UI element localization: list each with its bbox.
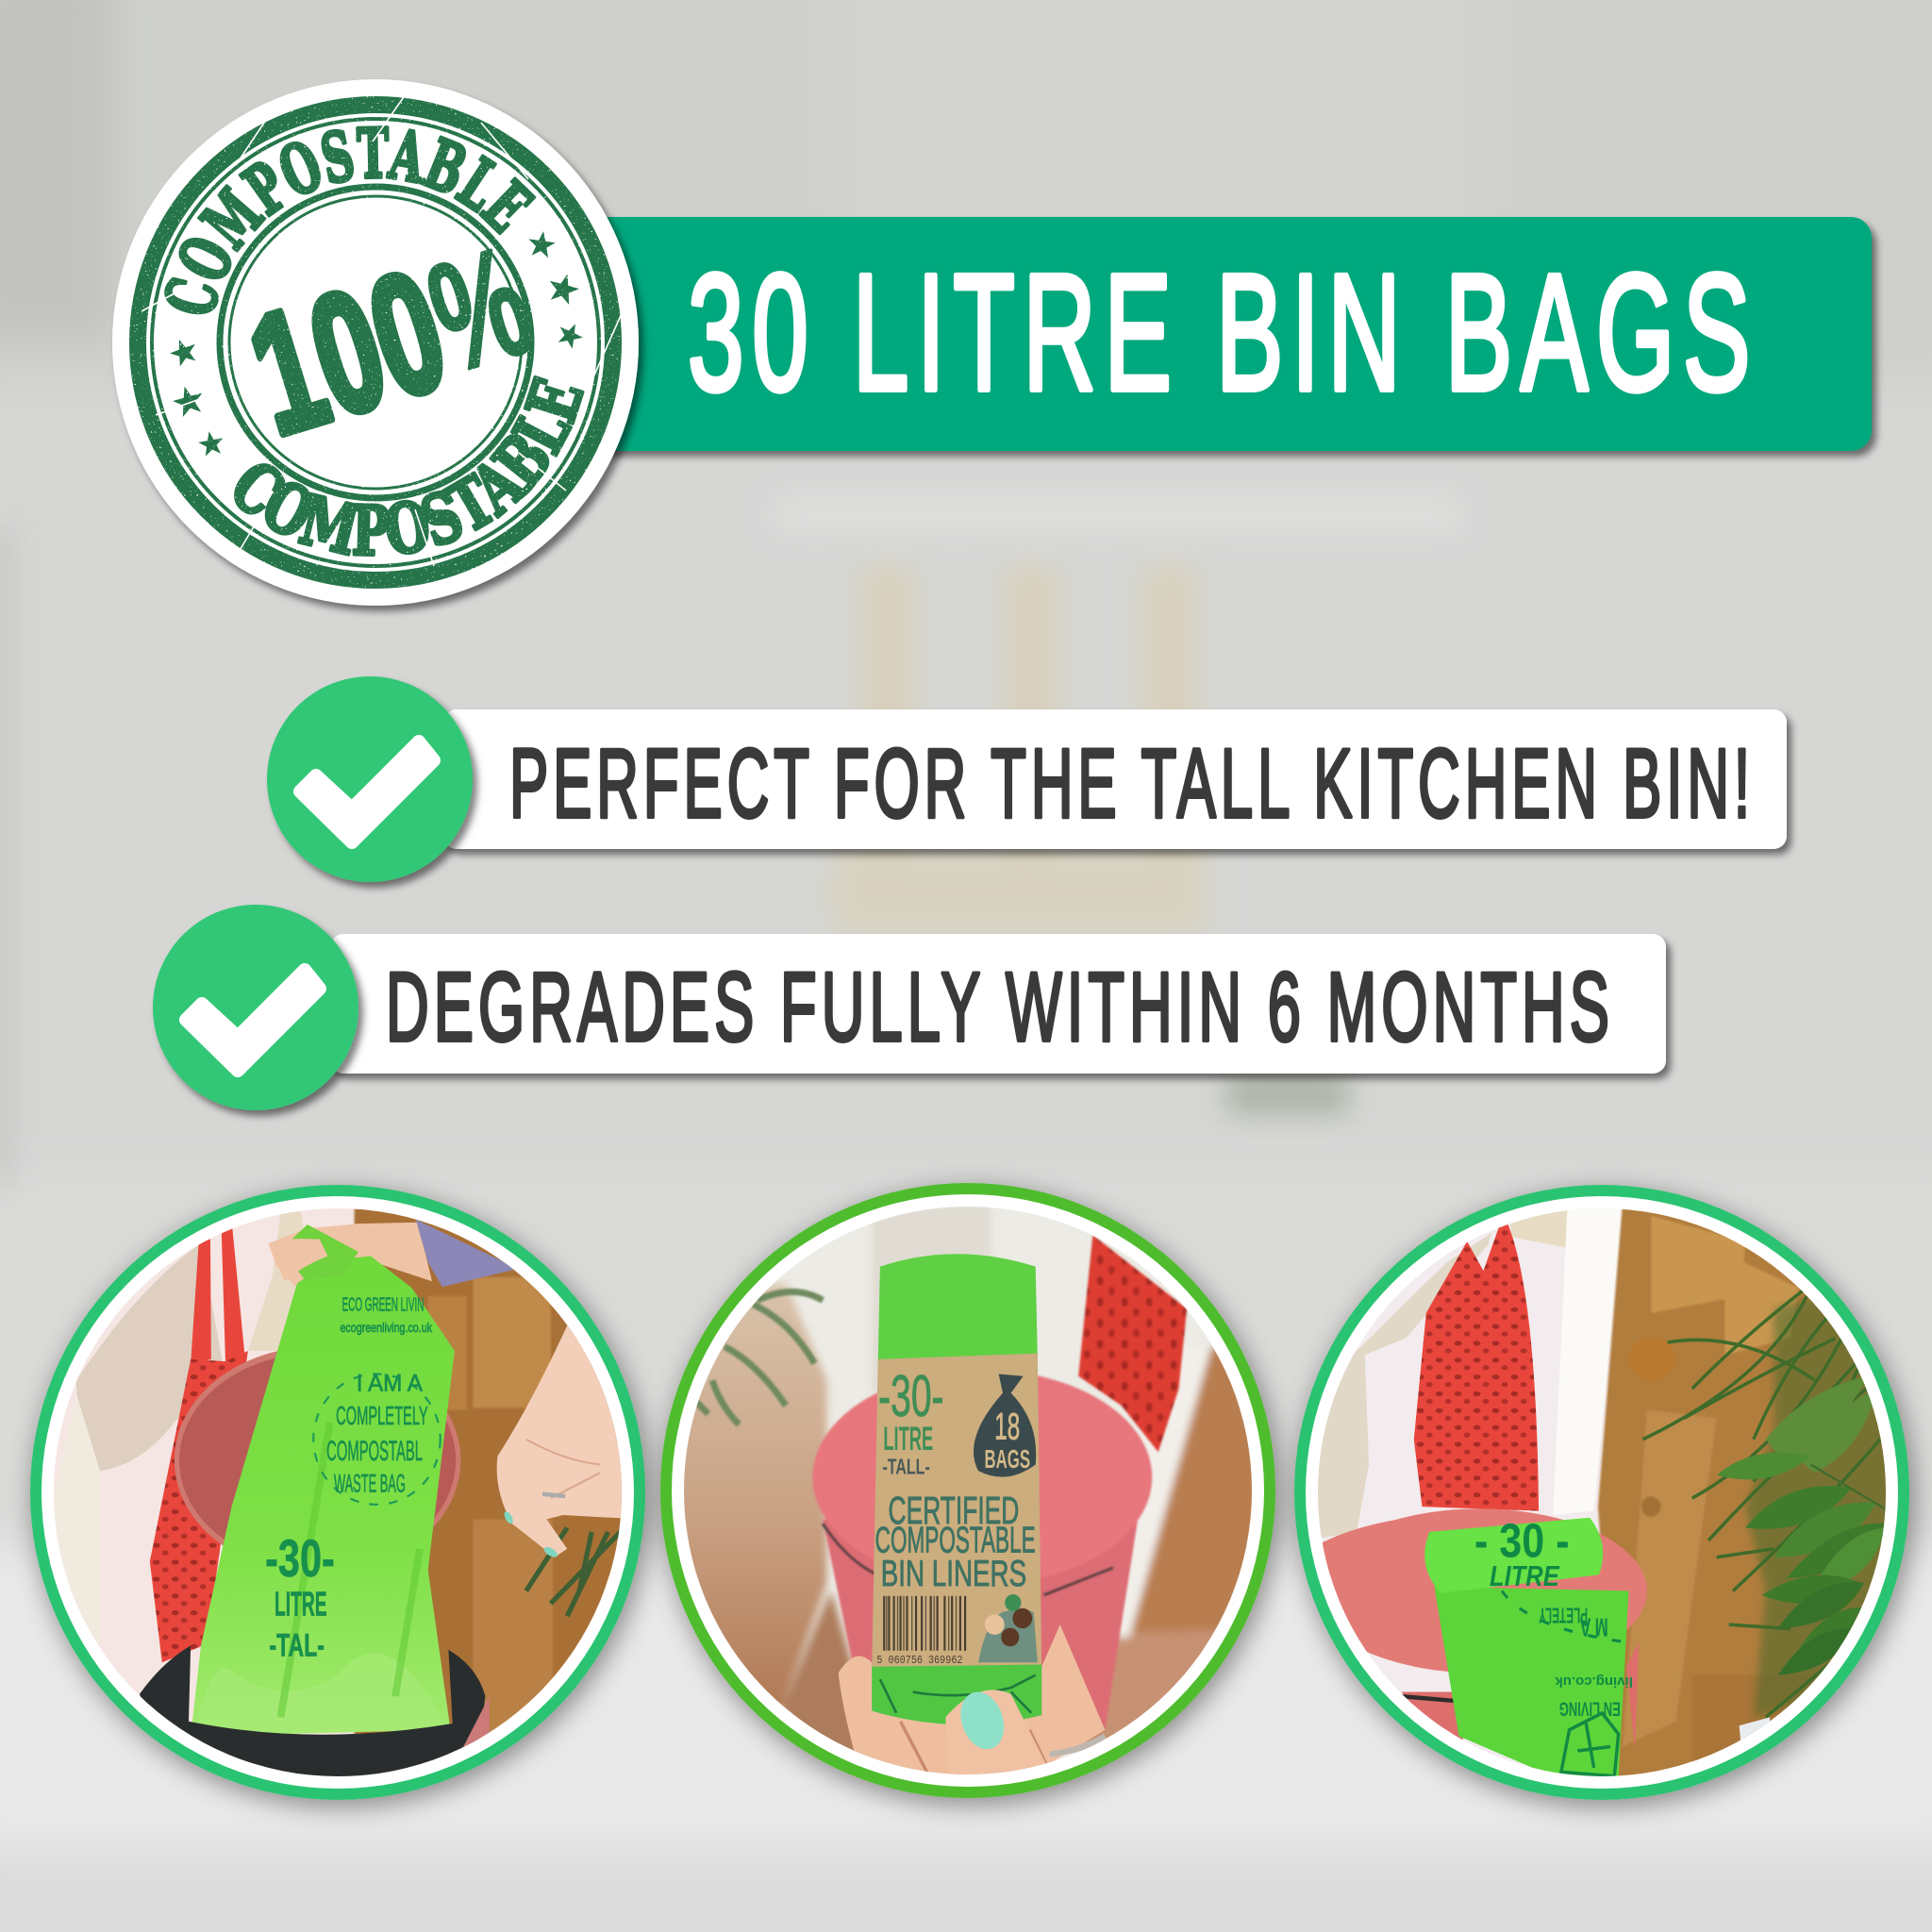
label text: compostable: COMPOSTABLE (875, 1520, 1036, 1560)
door (1598, 1204, 1913, 1793)
barcode (876, 1596, 965, 1667)
pink bin edge (453, 1696, 490, 1768)
pink bin (1311, 1508, 1647, 1768)
white cloth (54, 1396, 100, 1645)
photo 1 frame (30, 1185, 645, 1800)
roll print: litre: LITRE (1490, 1561, 1560, 1592)
stamp upper arc text: COMPOSTABLE (164, 125, 536, 315)
feature row 2 (153, 905, 1666, 1110)
green roll bottom (872, 1665, 1041, 1724)
tote bag (248, 1211, 304, 1351)
banner bar (528, 217, 1872, 451)
bag print: tall: -TAL- (269, 1628, 325, 1664)
plant shadow mass (1745, 1284, 1905, 1717)
black bin rim (140, 1645, 485, 1778)
hand holding roll (839, 1624, 1105, 1785)
photo 1 scene (54, 1208, 622, 1776)
label illustration of people (978, 1594, 1038, 1662)
barcode: 5 060756 369962 (876, 1655, 963, 1667)
feature bar 2 (330, 934, 1666, 1074)
green roll top (878, 1254, 1038, 1363)
lower right hand (497, 1322, 641, 1559)
kraft label (872, 1354, 1041, 1669)
plant (696, 1291, 823, 1424)
label text: tall: -TALL- (882, 1454, 930, 1478)
check icon 2 (153, 905, 358, 1110)
bag print: compostable: COMPOSTABL (326, 1437, 423, 1467)
bag print: url: ecogreenliving.co.uk (340, 1320, 433, 1335)
white pot (1740, 1717, 1770, 1747)
thin dark fronds (1643, 1288, 1880, 1591)
check icon 1 (267, 676, 473, 882)
dashed curve on sheet (1502, 1591, 1626, 1642)
tote top (1508, 1204, 1599, 1254)
green sheet (1434, 1587, 1628, 1778)
door knob (1628, 1338, 1675, 1381)
pink bin lid (174, 1351, 460, 1545)
stamp scratches (142, 94, 623, 566)
bag print: 30: -30- (265, 1528, 335, 1588)
photo 2: roll of liners held in hand (651, 1170, 1306, 1843)
red net (1078, 1235, 1187, 1452)
door frame (1553, 1206, 1623, 1515)
label text: 30: -30- (878, 1363, 944, 1429)
wooden door (353, 1209, 622, 1775)
upper hand fingers (269, 1239, 327, 1281)
distressed stamp artwork (129, 96, 622, 589)
feature row 1 (267, 676, 1787, 882)
label text: certified: CERTIFIED (889, 1488, 1019, 1532)
photo 1: bag being lifted out of bin (19, 1170, 674, 1843)
badge: 100% compostable stamp (111, 79, 648, 617)
sheet print: I am a: M A (1579, 1612, 1608, 1642)
stamp rings (138, 105, 613, 580)
red net bag (1414, 1224, 1539, 1511)
cream cloth left (1307, 1233, 1491, 1541)
green bag: ECO GREEN LIVIN (342, 1294, 424, 1316)
knitted cloth (76, 1243, 224, 1471)
photo 3: roll on pink bin by door and plant (1283, 1170, 1932, 1843)
nail (954, 1686, 1011, 1756)
stamp lower arc text: COMPOSTABLE (234, 375, 585, 557)
plant at right (526, 1527, 625, 1616)
stamp 100 percent: % (410, 212, 549, 406)
bag print: completely: COMPLETELY (336, 1401, 428, 1430)
broad leaves (1717, 1453, 1810, 1479)
badge white disc (112, 79, 639, 606)
red net bag (150, 1228, 248, 1662)
plant (1643, 1284, 1905, 1717)
photo 2 scene (651, 1170, 1306, 1843)
green bag: WASTE BAG (334, 1469, 406, 1498)
bag icon with 18 bags: 18 (994, 1406, 1020, 1448)
label text: litre: LITRE (883, 1421, 933, 1457)
roll and sheet print (1474, 1513, 1633, 1720)
green roll (1424, 1518, 1603, 1593)
pink bin (812, 1370, 1152, 1730)
sheet print: url: living.co.uk (1555, 1674, 1633, 1690)
thumb (945, 1690, 1046, 1785)
bag print: litre: LITRE (275, 1586, 327, 1623)
photo 3 frame (1294, 1185, 1909, 1800)
photo 3 scene (1283, 1170, 1932, 1843)
label text: bin liners: BIN LINERS (881, 1554, 1026, 1594)
feature bar 1 (443, 709, 1787, 849)
illustration on sheet (1561, 1713, 1619, 1776)
stamp 100 percent: 100 (231, 235, 465, 471)
bag icon with 18 bags: BAGS (984, 1444, 1030, 1474)
upper hand and sleeve (269, 1220, 518, 1288)
ring (1050, 1736, 1105, 1755)
roll print: 30: - 30 - (1474, 1513, 1570, 1568)
sheet print: brand: EN LIVING (1559, 1698, 1621, 1720)
photo 2 frame (660, 1183, 1275, 1798)
blurred surroundings (675, 1204, 1273, 1759)
title banner (528, 217, 1872, 451)
stamp stars (166, 229, 587, 457)
bag icon with 18 bags (974, 1374, 1036, 1477)
green bag (191, 1224, 455, 1736)
bag print: I am a: I AM A (357, 1371, 424, 1396)
roll bottom illustration (880, 1675, 1036, 1713)
sheet print: completely: PLETELY (1539, 1603, 1588, 1628)
